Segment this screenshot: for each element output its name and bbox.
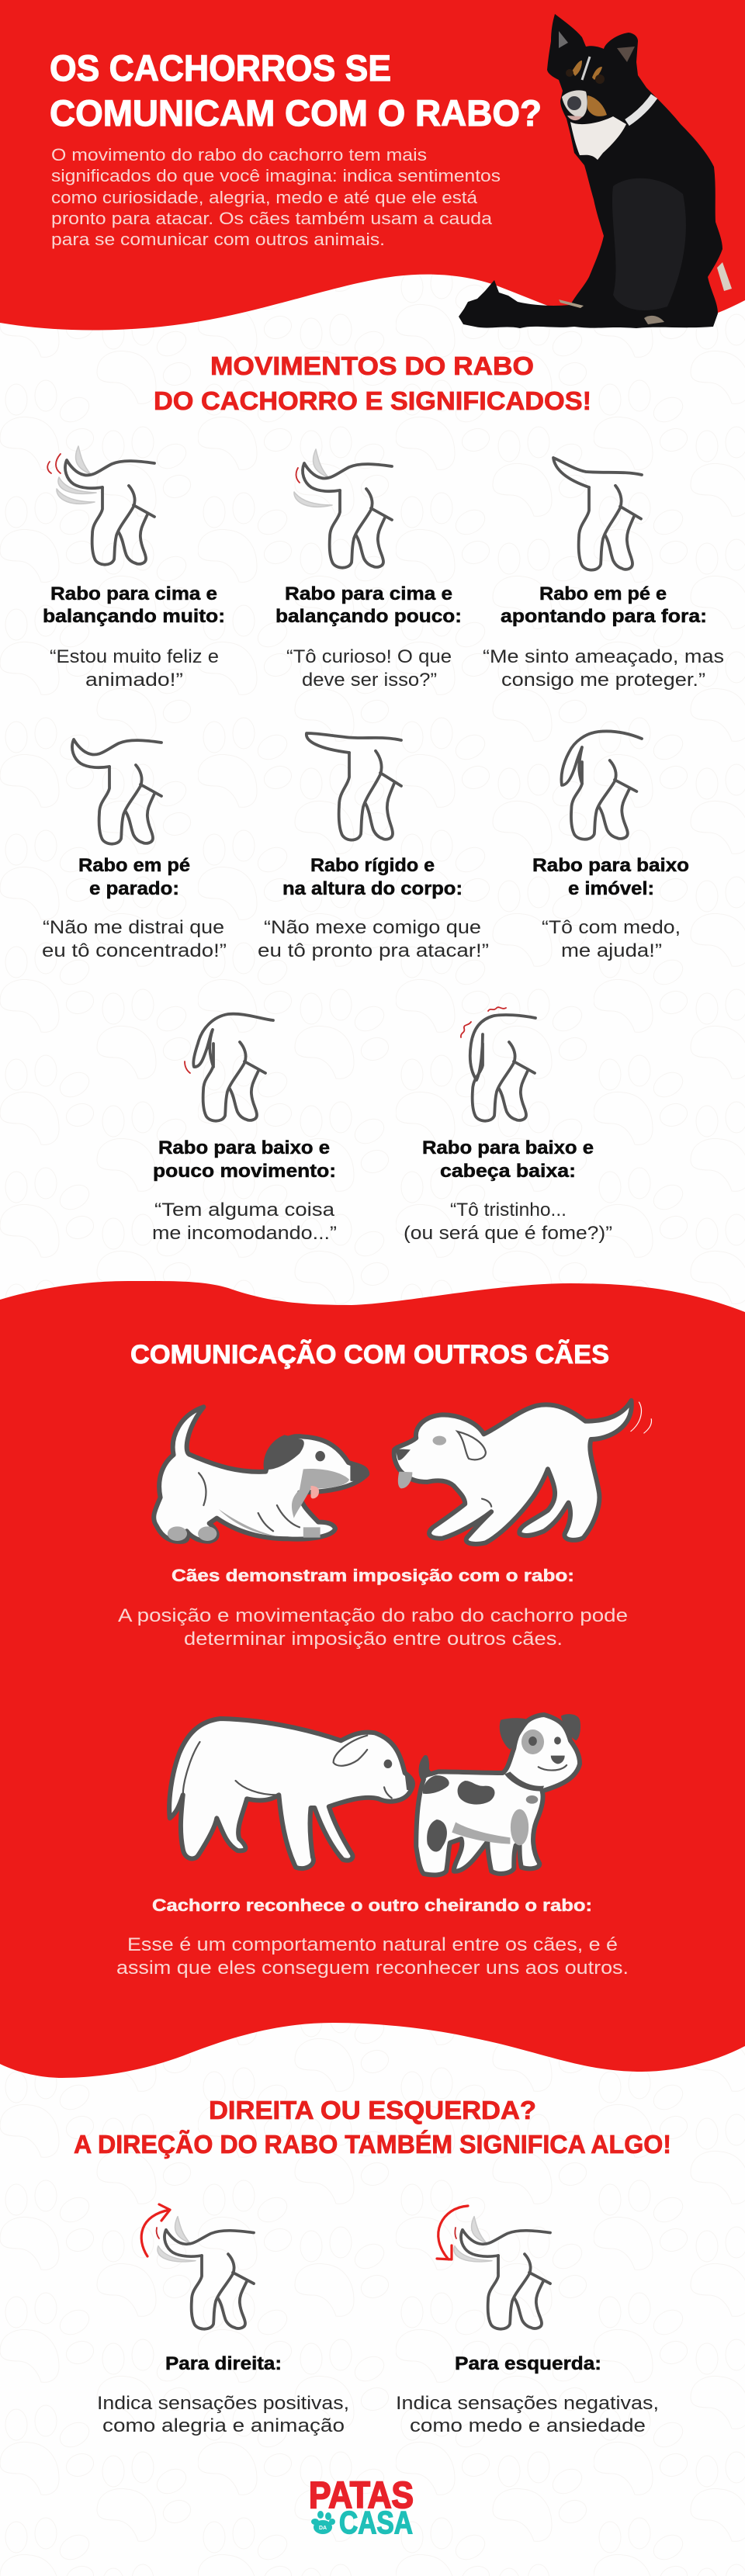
- title: COMUNICAM COM O RABO?: [50, 92, 542, 133]
- dog with wagging tail: [394, 1401, 651, 1544]
- heading: Rabo em pé: [78, 855, 190, 876]
- big white dog: [169, 1719, 414, 1868]
- quote: [542, 917, 681, 961]
- heading: movimentos do rabo: MOVIMENTOS DO RABO: [210, 351, 534, 380]
- quote: eu tô concentrado!”: [42, 940, 227, 961]
- description: Indica sensações negativas,: [396, 2393, 659, 2414]
- heading: [43, 583, 225, 627]
- heading: Rabo para cima e: [50, 583, 217, 604]
- quote: me ajuda!”: [561, 940, 662, 961]
- quote: [483, 646, 724, 691]
- heading: balançando muito:: [43, 606, 225, 627]
- quote: eu tô pronto pra atacar!”: [258, 940, 489, 961]
- description: A posição e movimentação do rabo do cachorro pode: [118, 1605, 628, 1626]
- quote: [42, 917, 227, 961]
- card: para direita: [97, 2204, 349, 2436]
- quote: (ou será que é fome?)”: [404, 1223, 612, 1244]
- quote: “Não mexe comigo que: [264, 917, 481, 938]
- description: Esse é um comportamento natural entre os cães, e é: [127, 1934, 618, 1955]
- description: Indica sensações positivas,: [97, 2393, 349, 2414]
- heading: direita ou esquerda: A DIREÇÃO DO RABO TAMBÉM SIGNIFICA ALGO!: [74, 2130, 671, 2159]
- card: rabo para cima balançando pouco: [275, 449, 462, 691]
- quote: “Tô com medo,: [542, 917, 681, 938]
- heading: movimentos do rabo: [154, 351, 591, 415]
- intro text: O movimento do rabo do cachorro tem mais: [51, 145, 427, 164]
- heading: movimentos do rabo: DO CACHORRO E SIGNIFICADOS!: [154, 386, 591, 415]
- quote: animado!”: [85, 670, 183, 691]
- red wave background: [0, 0, 745, 330]
- heading: cabeça baixa:: [440, 1161, 576, 1182]
- description: assim que eles conseguem reconhecer uns aos outros.: [116, 1958, 629, 1979]
- description: [116, 1934, 629, 1979]
- heading: direita ou esquerda: DIREITA OU ESQUERDA?: [209, 2096, 536, 2124]
- heading: Rabo para baixo e: [158, 1137, 330, 1158]
- heading: [501, 583, 707, 627]
- intro text: pronto para atacar. Os cães também usam a cauda: [51, 209, 493, 228]
- heading: pouco movimento:: [153, 1161, 336, 1182]
- label: Para esquerda:: [455, 2353, 601, 2374]
- card: rabo para baixo e imóvel: [532, 731, 689, 961]
- subheading: Cachorro reconhece o outro cheirando o rabo:: [152, 1896, 592, 1915]
- card: rabo para cima balançando muito: [43, 446, 225, 691]
- card: rabo em pé e parado: [42, 739, 227, 961]
- title: [50, 47, 542, 133]
- panel: comunicação com outros cães: [0, 1281, 745, 2078]
- intro text: como curiosidade, alegria, medo e até que ele está: [51, 188, 478, 207]
- intro text: para se comunicar com outros animais.: [51, 230, 385, 249]
- red wave panel: [0, 1281, 745, 2078]
- quote: “Tem alguma coisa: [154, 1200, 335, 1220]
- heading: [282, 855, 463, 899]
- logo: Patas da Casa: [309, 2475, 414, 2540]
- card: rabo para baixo e cabeça baixa: [404, 1007, 612, 1244]
- heading: apontando para fora:: [501, 606, 707, 627]
- icon: rigid horizontal tail: [307, 733, 401, 840]
- quote: consigo me proteger.”: [501, 670, 705, 691]
- heading: [422, 1137, 594, 1182]
- icon: low tail slight movement: [185, 1014, 273, 1121]
- heading: na altura do corpo:: [282, 878, 463, 899]
- heading: Rabo em pé e: [539, 583, 667, 604]
- quote: [152, 1200, 337, 1244]
- heading: [275, 583, 462, 627]
- description: [97, 2393, 349, 2436]
- description: [396, 2393, 659, 2436]
- icon: low tail and low head: [461, 1007, 535, 1121]
- heading: [153, 1137, 336, 1182]
- description: como alegria e animação: [102, 2415, 345, 2436]
- heading: Rabo para baixo: [532, 855, 689, 876]
- heading: e imóvel:: [568, 878, 654, 899]
- heading: balançando pouco:: [275, 606, 462, 627]
- quote: [404, 1200, 612, 1244]
- quote: “Me sinto ameaçado, mas: [483, 646, 724, 667]
- heading: e parado:: [89, 878, 179, 899]
- quote: [258, 917, 489, 961]
- heading: direita ou esquerda: [74, 2096, 671, 2159]
- icon: still raised tail: [72, 739, 161, 844]
- description: determinar imposição entre outros cães.: [184, 1629, 563, 1650]
- quote: “Tô curioso! O que: [286, 646, 452, 667]
- label: Para direita:: [165, 2353, 282, 2374]
- icon: still lowered tail: [561, 731, 642, 840]
- illustration: two dogs playing: [154, 1401, 651, 1544]
- card: rabo rígido na altura do corpo: [258, 733, 489, 961]
- quote: deve ser isso?”: [302, 670, 437, 691]
- card: rabo em pé apontando para fora: [483, 458, 724, 691]
- icon: teal paw: DA: [319, 2526, 327, 2531]
- quote: “Não me distrai que: [43, 917, 224, 938]
- intro text: significados do que você imagina: indica sentimentos: [51, 166, 501, 185]
- heading: COMUNICAÇÃO COM OUTROS CÃES: [130, 1340, 609, 1369]
- quote: [286, 646, 452, 691]
- illustration: dog sniffing another dog: [169, 1714, 580, 1875]
- intro text: [51, 145, 501, 249]
- card: rabo para baixo e pouco movimento: [152, 1014, 337, 1244]
- panel: header: [0, 0, 745, 330]
- quote: “Tô tristinho...: [450, 1200, 567, 1220]
- logo: Patas da Casa: CASA: [339, 2505, 413, 2540]
- quote: me incomodando...”: [152, 1223, 337, 1244]
- heading: Rabo para cima e: [285, 583, 452, 604]
- description: [118, 1605, 628, 1650]
- icon: tail with arrow to the left: [437, 2206, 550, 2329]
- heading: Rabo rígido e: [310, 855, 435, 876]
- spotted small dog: [416, 1714, 580, 1875]
- photo: sitting black dog: [459, 14, 732, 328]
- quote: “Estou muito feliz e: [50, 646, 219, 667]
- description: como medo e ansiedade: [410, 2415, 646, 2436]
- icon: tail wagging a lot: [47, 446, 154, 565]
- heading: [78, 855, 190, 899]
- subheading: Cães demonstram imposição com o rabo:: [172, 1566, 574, 1585]
- icon: tail pointing out: [553, 458, 642, 570]
- title: OS CACHORROS SE: [50, 47, 391, 88]
- dog in play bow: [154, 1407, 368, 1542]
- icon: tail with arrow to the right: [141, 2204, 254, 2329]
- heading: Rabo para baixo e: [422, 1137, 594, 1158]
- logo: Patas da Casa: PATAS: [309, 2475, 414, 2516]
- heading: [532, 855, 689, 899]
- quote: [50, 646, 219, 691]
- icon: tail wagging a little: [294, 449, 392, 568]
- card: para esquerda: [396, 2206, 659, 2436]
